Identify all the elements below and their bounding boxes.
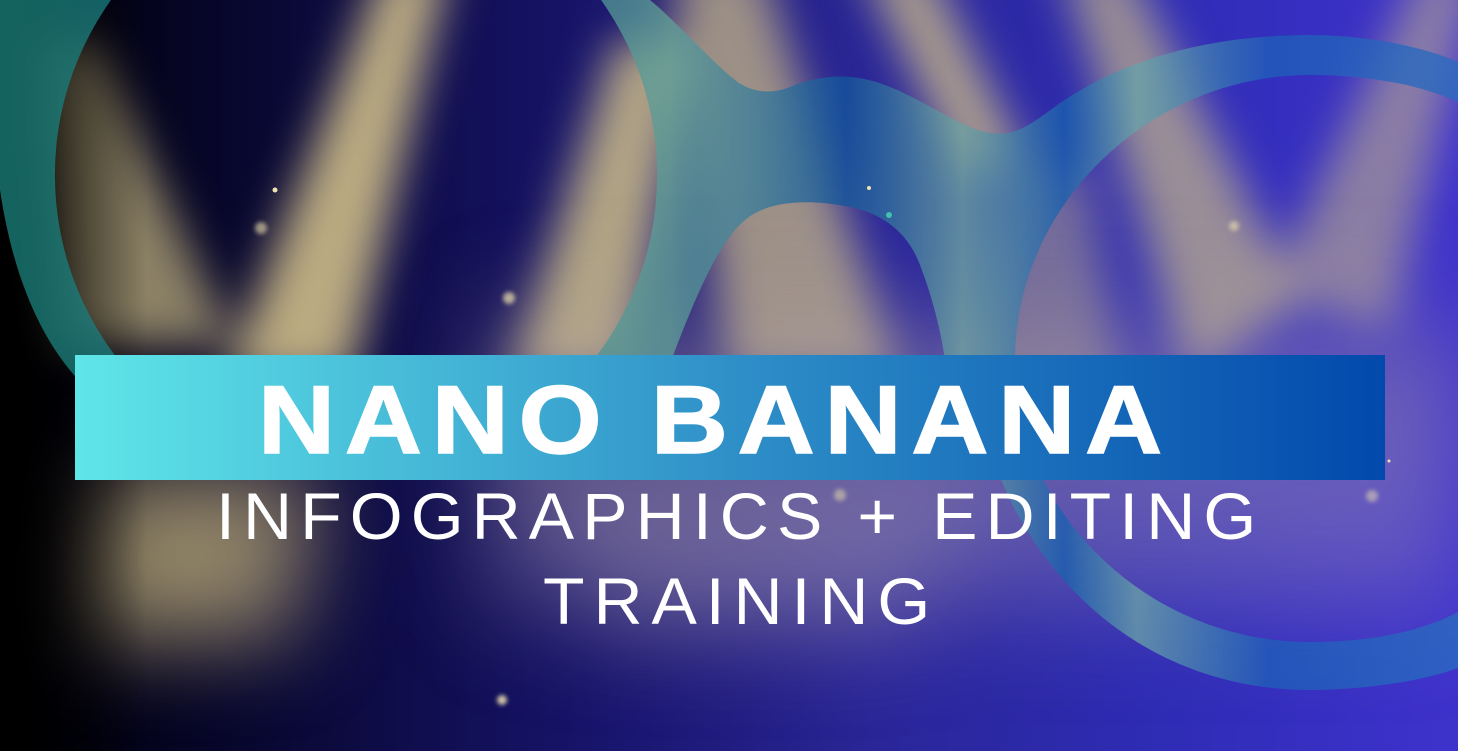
sparkles [255, 186, 1390, 705]
light glow lower [70, 270, 1458, 650]
title: NANO BANANA [258, 365, 1162, 474]
title bar [75, 355, 1385, 480]
subtitle line 1: INFOGRAPHICS + EDITING [216, 480, 1256, 554]
light beams upper [10, 0, 1458, 400]
subtitle line 2: TRAINING [543, 565, 930, 639]
